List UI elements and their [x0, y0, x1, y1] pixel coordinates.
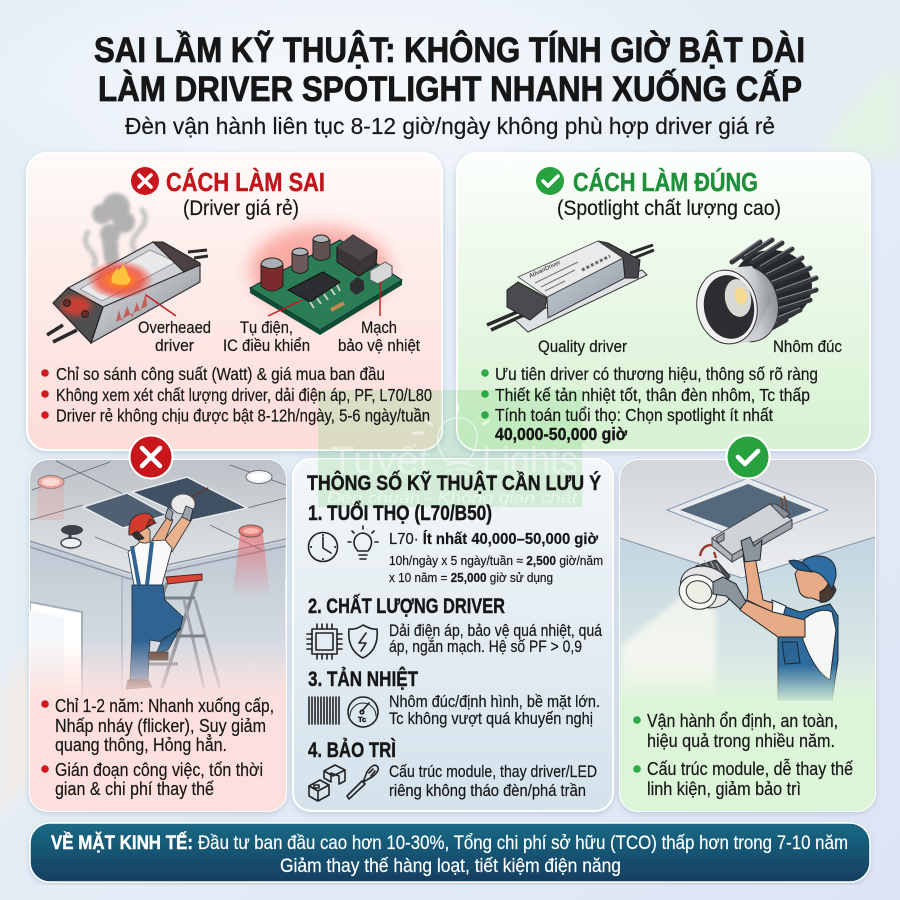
spec 4: maintenance [308, 739, 597, 801]
list: consequences: quang thông, Hỏng hẳn. [55, 734, 227, 755]
watermark: Tuyết [330, 440, 430, 482]
list: benefits [633, 711, 853, 799]
icon: heat sink [309, 697, 339, 724]
panel: wrong way [27, 153, 442, 450]
spec 2: driver quality [307, 595, 602, 659]
list: wrong way bullets [41, 364, 432, 426]
heading: right way: CÁCH LÀM ĐÚNG [573, 167, 758, 197]
list: wrong way bullets: Driver rẻ không chịu được bật 8-12h/ngày, 5-6 ngày/tuần [56, 406, 430, 426]
icon: shield [349, 625, 377, 658]
icon: clock [308, 532, 338, 562]
spec 1: lifetime [308, 501, 603, 585]
labels: bad driver parts: bảo vệ nhiệt [338, 336, 420, 355]
labels: bad driver parts: driver [155, 336, 194, 355]
list: consequences: Gián đoạn công việc, tốn thời [55, 760, 263, 780]
labels: bad driver parts: Mạch [361, 318, 397, 337]
spec 4: maintenance: Cấu trúc module, thay driver/LED [389, 762, 597, 781]
watermark: Lights [482, 440, 578, 482]
icon: Tc gauge [348, 697, 378, 727]
watermark: Đèn chuẩn - Không gian chất [327, 489, 578, 507]
list: consequences: gian & chi phí thay thế [55, 779, 214, 799]
icon: bulb [348, 526, 378, 559]
spec 2: driver quality: áp, ngắn mạch. Hệ số PF > 0,9 [389, 637, 582, 656]
labels: good parts: Nhôm đúc [773, 337, 842, 356]
icon: chip [307, 624, 342, 659]
illustration: die-cast spotlight [691, 238, 816, 349]
ladder [128, 574, 220, 688]
illustration: circuit board [250, 226, 402, 335]
worker [126, 506, 193, 689]
spec 1: lifetime: 10h/ngày x 5 ngày/tuần ≈ 2,500 giờ/năm [389, 553, 603, 568]
subtitle: Đèn vận hành liên tục 8-12 giờ/ngày không phù hợp driver giá rẻ [125, 113, 775, 139]
spec 1: lifetime: L70· Ít nhất 40,000–50,000 giờ [389, 529, 599, 548]
spec 2: driver quality: Dải điện áp, bảo vệ quá nhiệt, quá [389, 621, 602, 640]
badge: cross [130, 436, 172, 478]
labels: bad driver parts: Overheaed [138, 318, 211, 337]
list: wrong way bullets: Không xem xét chất lượng driver, dải điện áp, PF, L70/L80 [56, 385, 432, 405]
list: right way bullets: Ưu tiên driver có thương hiệu, thông số rõ ràng [495, 364, 818, 384]
banner: economic summary: VỀ MẶT KINH TẾ: [51, 831, 193, 854]
panel: right result [620, 460, 876, 812]
illustration: overheated driver [47, 193, 208, 343]
panel: right way [457, 153, 870, 450]
spec 3: heat dissipation [308, 667, 600, 728]
labels: bad driver parts [138, 318, 420, 355]
icon: screwdriver [347, 765, 378, 799]
watermark [318, 404, 582, 507]
list: consequences [41, 696, 274, 799]
icon: modules [309, 765, 345, 801]
illustration: quality driver: AdvanDriver [528, 260, 562, 280]
illustration: worker installing a modular lamp [620, 460, 876, 812]
spec 3: heat dissipation: 3. TẢN NHIỆT [308, 667, 418, 691]
banner: economic summary: Giảm thay thế hàng loạt, tiết kiệm điện năng [280, 855, 621, 877]
illustration: worker replacing a failed lamp [30, 460, 286, 812]
spec 1: lifetime: x 10 năm = 25,000 giờ sử dụng [389, 570, 553, 585]
list: right way bullets: 40,000-50,000 giờ [495, 424, 628, 444]
labels: bad driver parts: IC điều khiển [223, 336, 310, 355]
heading: wrong way: CÁCH LÀM SAI [166, 168, 325, 197]
spec 3: heat dissipation: Tc không vượt quá khuyến nghị [389, 709, 593, 728]
list: benefits: Vận hành ổn định, an toàn, [647, 711, 838, 731]
worker [713, 537, 838, 700]
heading: right way: (Spotlight chất lượng cao) [557, 197, 781, 220]
list: consequences: Nhấp nháy (flicker), Suy giảm [55, 716, 266, 736]
banner: economic summary [30, 823, 870, 882]
list: right way bullets: Tính toán tuổi thọ: Chọn spotlight ít nhất [495, 405, 773, 425]
title [94, 30, 805, 109]
driver being installed [712, 496, 792, 562]
heading: wrong way: (Driver giá rẻ) [183, 197, 299, 220]
list: right way bullets [481, 364, 818, 444]
spec 2: driver quality: 2. CHẤT LƯỢNG DRIVER [308, 595, 505, 618]
list: consequences: Chỉ 1-2 năm: Nhanh xuống cấp, [55, 696, 274, 716]
heading: right way [536, 167, 781, 220]
list: benefits: Cấu trúc module, dễ thay thế [647, 758, 853, 779]
spec 3: heat dissipation: Nhôm đúc/định hình, bề mặt lớn. [389, 692, 600, 711]
spec 1: lifetime: 1. TUỔI THỌ (L70/B50) [308, 501, 492, 525]
title: SAI LẦM KỸ THUẬT: KHÔNG TÍNH GIỜ BẬT DÀI [94, 30, 805, 70]
list: benefits: linh kiện, giảm bảo trì [647, 779, 801, 799]
panel: wrong result [30, 460, 286, 812]
title: LÀM DRIVER SPOTLIGHT NHANH XUỐNG CẤP [98, 69, 802, 109]
spec 3: heat dissipation: Tc [358, 715, 366, 724]
panel: technical specs [293, 404, 613, 811]
lamp [678, 559, 730, 610]
spec 4: maintenance: 4. BẢO TRÌ [308, 739, 396, 762]
list: right way bullets: Thiết kế tản nhiệt tốt, thân đèn nhôm, Tc thấp [495, 385, 810, 405]
list: benefits: hiệu quả trong nhiều năm. [647, 731, 835, 751]
heading: wrong way [131, 167, 325, 220]
labels: bad driver parts: Tụ điện, [240, 318, 293, 337]
spec 4: maintenance: riêng không tháo đèn/phá trần [389, 781, 586, 800]
badge: check [726, 436, 770, 478]
labels: good parts [538, 337, 842, 356]
illustration: quality driver [487, 241, 654, 332]
heading: specs: THÔNG SỐ KỸ THUẬT CẦN LƯU Ý [307, 471, 601, 495]
labels: good parts: Quality driver [538, 337, 627, 356]
list: wrong way bullets: Chỉ so sánh công suất (Watt) & giá mua ban đầu [56, 364, 385, 384]
